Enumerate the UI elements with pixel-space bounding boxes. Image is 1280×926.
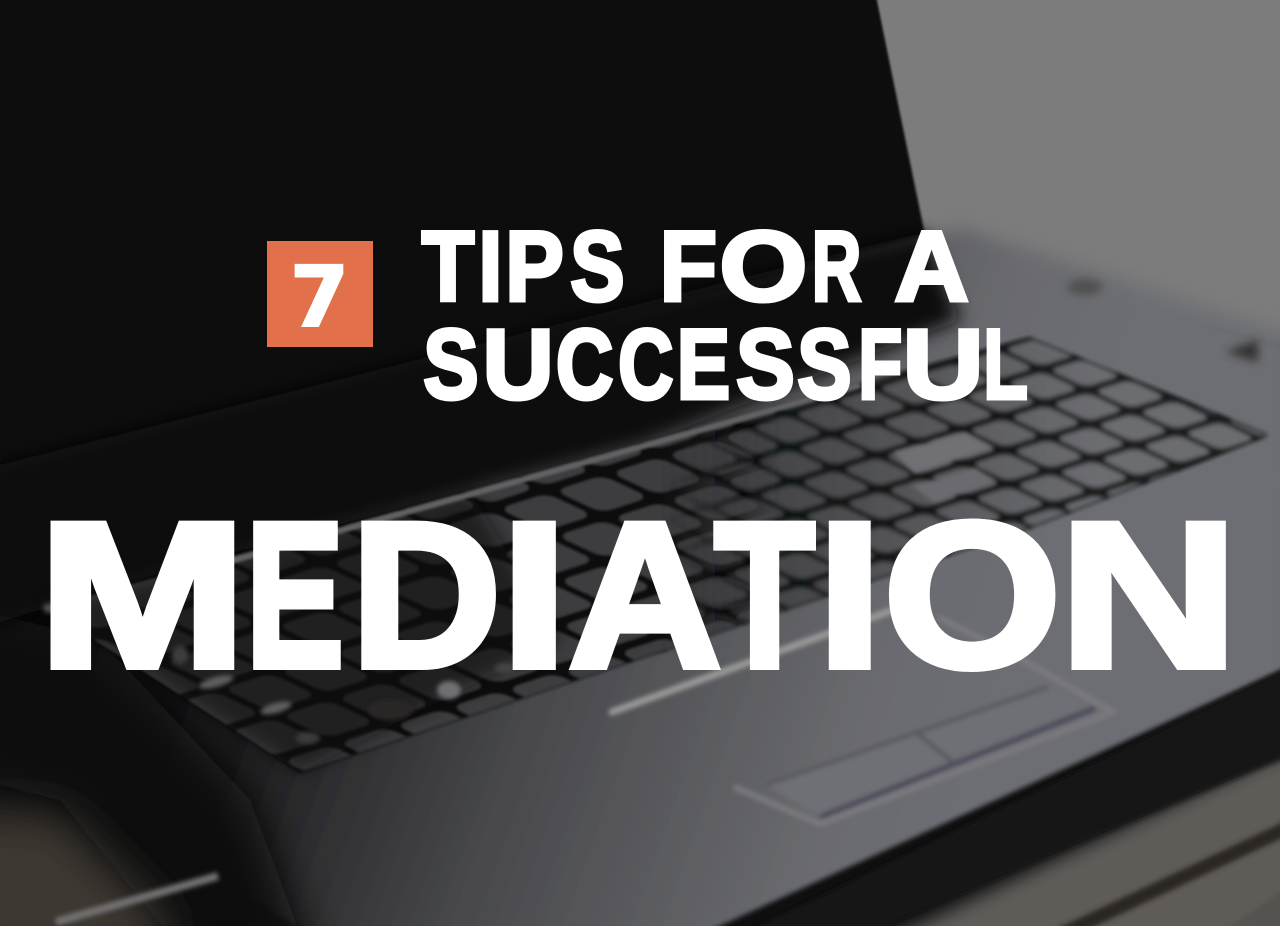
heading: TIPS FOR A SUCCESSFUL: R xyxy=(812,210,861,322)
heading: MEDIATION: D xyxy=(351,480,501,710)
heading: TIPS FOR A SUCCESSFUL: A xyxy=(894,210,969,322)
heading: TIPS FOR A SUCCESSFUL: U xyxy=(903,308,984,420)
heading: MEDIATION: E xyxy=(246,480,344,710)
heading: TIPS FOR A SUCCESSFUL: S xyxy=(797,308,852,420)
keyboard xyxy=(41,334,1269,775)
badge: number 7: 7 xyxy=(290,248,349,346)
touchpad xyxy=(612,610,1113,824)
heading: TIPS FOR A SUCCESSFUL: C xyxy=(556,308,613,420)
top-right hinge bumps xyxy=(1067,279,1258,362)
heading: TIPS FOR A SUCCESSFUL: S xyxy=(736,308,795,420)
table highlight xyxy=(56,876,218,922)
heading: MEDIATION: N xyxy=(1059,480,1238,710)
heading: TIPS FOR A SUCCESSFUL: C xyxy=(618,308,673,420)
heading: TIPS FOR A SUCCESSFUL: P xyxy=(505,210,564,322)
heading: MEDIATION: I xyxy=(817,480,882,710)
heading: TIPS FOR A SUCCESSFUL: F xyxy=(660,210,717,322)
heading: TIPS FOR A SUCCESSFUL: L xyxy=(983,308,1028,420)
heading: TIPS FOR A SUCCESSFUL xyxy=(422,210,1028,420)
heading: TIPS FOR A SUCCESSFUL: S xyxy=(570,210,624,322)
heading: TIPS FOR A SUCCESSFUL: I xyxy=(478,210,502,322)
heading: MEDIATION: T xyxy=(714,480,815,710)
heading: TIPS FOR A SUCCESSFUL: S xyxy=(423,308,479,420)
heading: TIPS FOR A SUCCESSFUL: F xyxy=(858,308,902,420)
heading: MEDIATION: A xyxy=(568,480,722,710)
heading: MEDIATION: O xyxy=(883,480,1061,710)
badge: number 7 xyxy=(267,241,373,347)
heading: MEDIATION: I xyxy=(500,480,568,710)
heading: TIPS FOR A SUCCESSFUL: T xyxy=(422,210,474,322)
heading: MEDIATION: M xyxy=(38,480,247,710)
heading: TIPS FOR A SUCCESSFUL: E xyxy=(677,308,730,420)
heading: TIPS FOR A SUCCESSFUL: U xyxy=(483,308,554,420)
heading: TIPS FOR A SUCCESSFUL: O xyxy=(720,210,807,322)
